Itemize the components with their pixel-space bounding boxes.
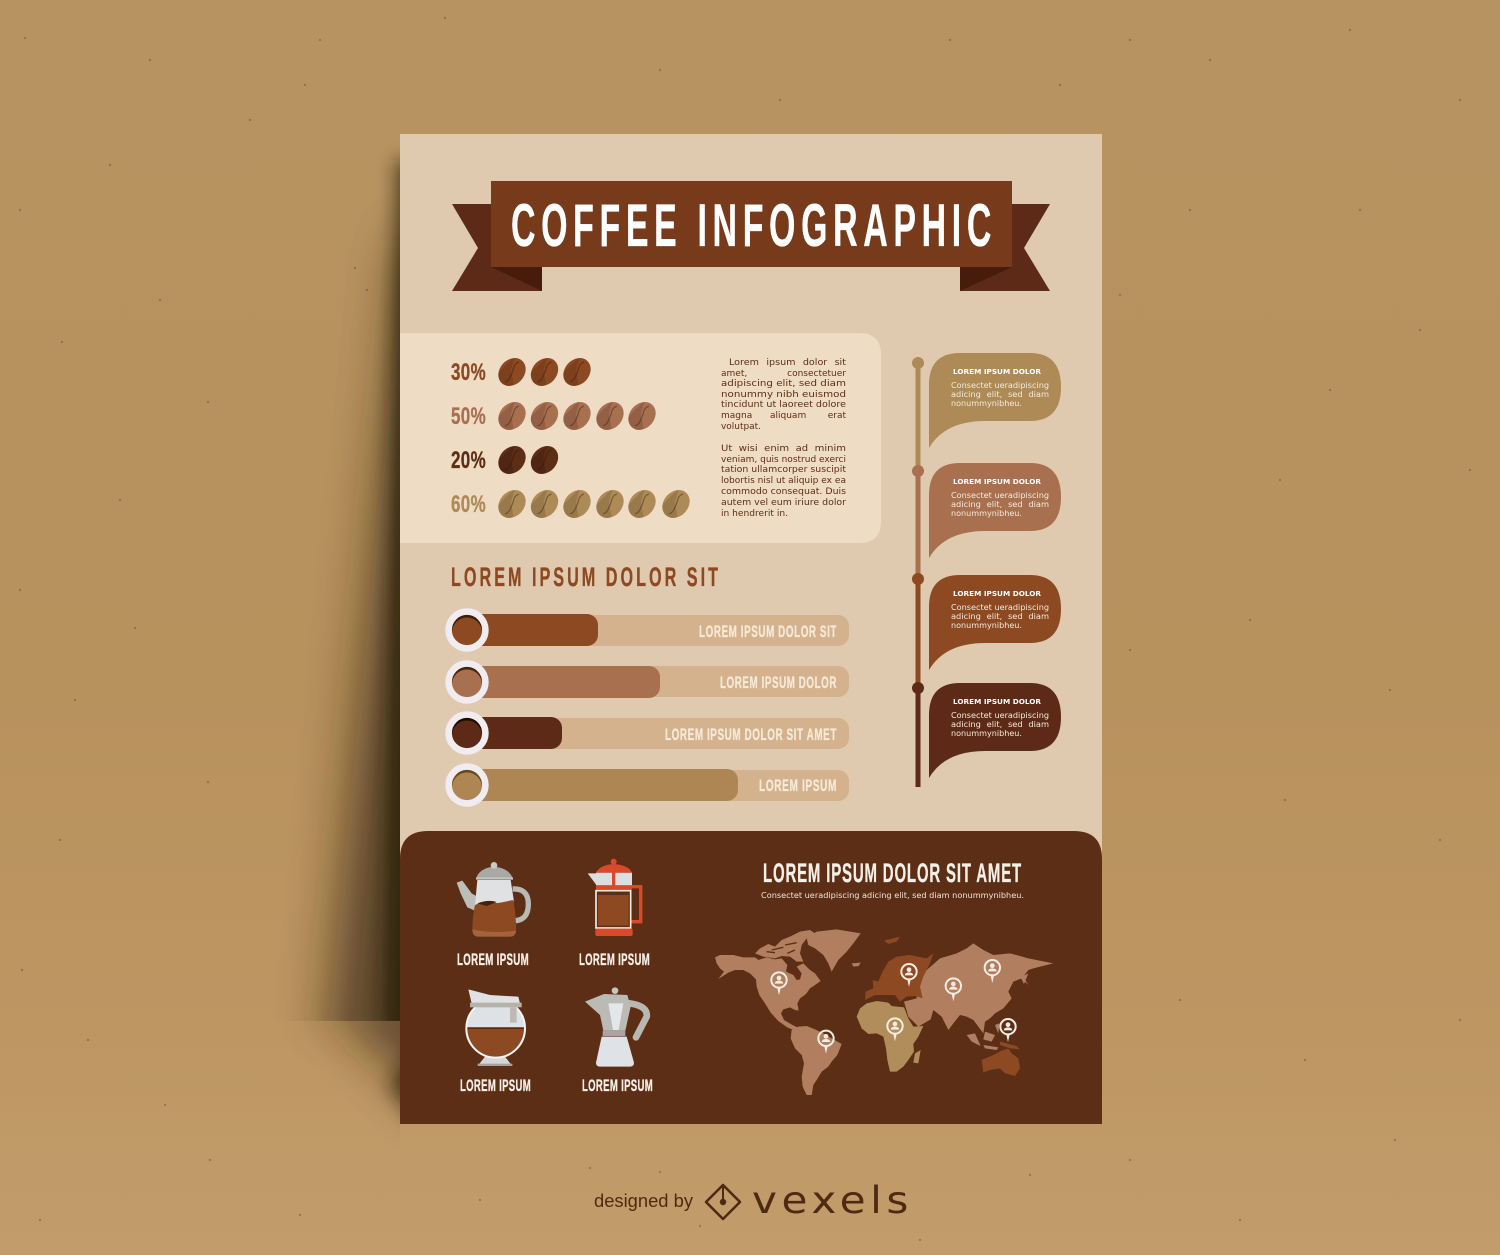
bar 2: LOREM IPSUM DOLOR <box>720 673 837 692</box>
row 60%: 60% <box>451 491 486 518</box>
callout 4 <box>929 683 1061 778</box>
row 60% <box>451 484 695 524</box>
text block: volutpat. <box>721 422 761 432</box>
icon labels: LOREM IPSUM <box>457 950 529 969</box>
map pins <box>771 960 1016 1054</box>
callout 3: LOREM IPSUM DOLOR <box>953 589 1041 598</box>
row 30% <box>451 352 596 392</box>
text block: nonummy nibh euismod <box>721 390 846 400</box>
bar 3 <box>449 715 849 751</box>
poster <box>400 134 1102 1124</box>
callout 3: adicing elit, sed diam <box>951 612 1049 621</box>
callout 4: adicing elit, sed diam <box>951 720 1049 729</box>
callout 2: nonummynibheu. <box>951 509 1022 518</box>
world map <box>715 929 1053 1095</box>
text block <box>721 358 846 519</box>
text block: Lorem ipsum dolor sit <box>729 358 846 368</box>
icon: french press <box>588 859 641 936</box>
callout 2: Consectet ueradipiscing <box>951 491 1049 500</box>
text block: consectetuer <box>787 369 846 379</box>
icon labels: LOREM IPSUM <box>582 1076 653 1095</box>
icon: moka pot <box>585 987 647 1067</box>
icon labels <box>457 950 653 1095</box>
callout 1: LOREM IPSUM DOLOR <box>953 367 1041 376</box>
bar 3: LOREM IPSUM DOLOR SIT AMET <box>665 725 837 744</box>
designed by: designed by <box>594 1191 693 1211</box>
callout 2 <box>929 463 1061 558</box>
callout 1: adicing elit, sed diam <box>951 390 1049 399</box>
timeline <box>912 357 924 787</box>
text block: aliquam <box>770 411 806 421</box>
row 20% <box>451 440 564 480</box>
ribbon tail right <box>960 204 1050 291</box>
text block: commodo consequat. Duis <box>721 487 846 497</box>
text block: tincidunt ut laoreet dolore <box>721 400 846 410</box>
text block: adipiscing elit, sed diam <box>721 379 846 389</box>
icon: vexels diamond logo <box>706 1185 740 1219</box>
icon labels: LOREM IPSUM <box>460 1076 531 1095</box>
text block: in hendrerit in. <box>721 509 788 519</box>
bar 4: LOREM IPSUM <box>759 776 837 795</box>
text block: amet, <box>721 369 747 379</box>
text block: tation ullamcorper suscipit <box>721 465 846 475</box>
vexels credit <box>594 1179 913 1222</box>
progress bars <box>449 612 849 803</box>
row 50%: 50% <box>451 403 486 430</box>
vexels wordmark: vexels <box>752 1179 913 1222</box>
callout 1: nonummynibheu. <box>951 399 1022 408</box>
poster shadow on floor <box>306 1021 400 1126</box>
row 20%: 20% <box>451 447 486 474</box>
poster shadow on wall <box>292 149 400 1021</box>
section heading: LOREM IPSUM DOLOR SIT <box>451 562 721 592</box>
callout 2: LOREM IPSUM DOLOR <box>953 477 1041 486</box>
callout 1: Consectet ueradipiscing <box>951 381 1049 390</box>
icon: glass carafe <box>466 989 525 1066</box>
map subheading: Consectet ueradipiscing adicing elit, sed diam nonummynibheu. <box>761 890 1024 900</box>
panel: coffee bean statistics <box>400 333 881 543</box>
callout 2: adicing elit, sed diam <box>951 500 1049 509</box>
text block: autem vel eum iriure dolor <box>721 498 846 508</box>
bar 1: LOREM IPSUM DOLOR SIT <box>699 622 837 641</box>
text block: magna <box>721 411 752 421</box>
bar 4 <box>449 767 849 803</box>
callout 1 <box>929 353 1061 448</box>
icon labels: LOREM IPSUM <box>579 950 650 969</box>
row 50% <box>451 396 661 436</box>
panel: brewing methods and world map <box>400 831 1102 1124</box>
text block: Ut wisi enim ad minim <box>721 444 846 454</box>
bar 1 <box>449 612 849 648</box>
text block: veniam, quis nostrud exerci <box>721 455 846 465</box>
callout 3: Consectet ueradipiscing <box>951 603 1049 612</box>
map heading: LOREM IPSUM DOLOR SIT AMET <box>763 858 1022 888</box>
row 30%: 30% <box>451 359 486 386</box>
callout 3: nonummynibheu. <box>951 621 1022 630</box>
callout 3 <box>929 575 1061 670</box>
callout 4: Consectet ueradipiscing <box>951 711 1049 720</box>
text block: lobortis nisl ut aliquip ex ea <box>721 476 846 486</box>
bar 2 <box>449 664 849 700</box>
callout 4: nonummynibheu. <box>951 729 1022 738</box>
text block: erat <box>828 411 846 421</box>
icon: teapot <box>457 862 528 937</box>
callout 4: LOREM IPSUM DOLOR <box>953 697 1041 706</box>
title banner <box>452 181 1050 291</box>
title: COFFEE INFOGRAPHIC <box>511 192 997 259</box>
ribbon tail left <box>452 204 542 291</box>
